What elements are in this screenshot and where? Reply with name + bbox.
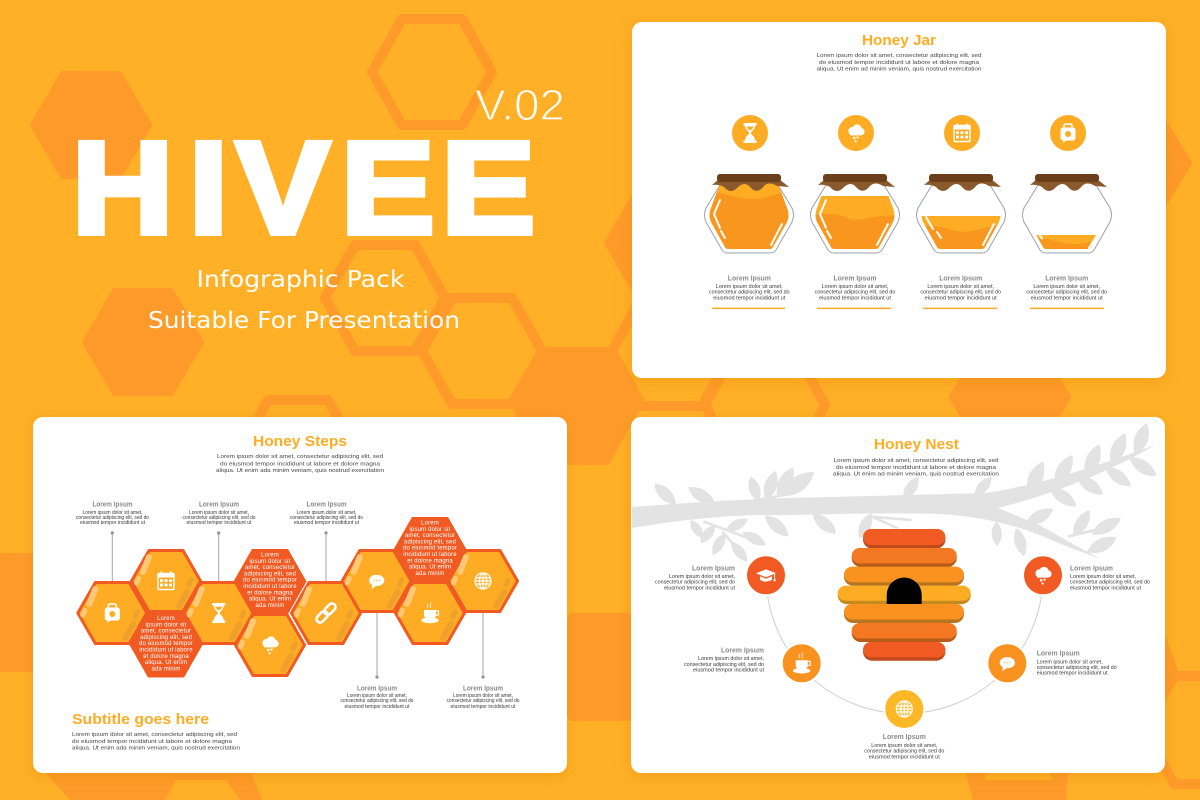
callout bottom 1: consectetur adipiscing elit, sed do <box>340 698 414 704</box>
arc connector <box>766 575 1043 714</box>
label: cloud <box>1070 566 1150 592</box>
callout bottom 2: Lorem ipsum dolor sit amet, <box>453 693 513 699</box>
label: graduation: Lorem ipsum dolor sit amet, <box>669 574 735 580</box>
jar caption 1 <box>709 276 790 309</box>
intro text <box>216 454 384 474</box>
label: graduation <box>655 566 736 592</box>
hex: text 3: ada minim <box>415 571 445 577</box>
label: globe: Lorem Ipsum <box>883 734 926 741</box>
title: honey nest: Honey Nest <box>874 436 959 453</box>
jar caption 1: Lorem Ipsum <box>728 276 771 282</box>
hex: text 1: ipsum dolor sit <box>146 622 187 628</box>
hex: chat <box>342 550 411 612</box>
icon: bag <box>1050 115 1086 151</box>
hex: text 3: et dolore magna <box>407 558 453 564</box>
jar 2: three quarters <box>810 174 900 255</box>
jar caption 4: consectetur adipiscing elit, sed do <box>1026 290 1107 296</box>
subtitle block <box>72 711 240 752</box>
callout bottom 2: Lorem Ipsum <box>463 685 503 692</box>
label: chat: consectetur adipiscing elit, sed do <box>1037 665 1117 671</box>
hex: globe <box>448 550 518 612</box>
label: globe: Lorem ipsum dolor sit amet, <box>871 743 937 749</box>
label: cloud: Lorem Ipsum <box>1070 566 1113 573</box>
hex: text 1: adipiscing elit, sed <box>140 635 192 641</box>
honeycomb chart <box>78 517 518 678</box>
jar caption 4: Lorem Ipsum <box>1045 276 1088 282</box>
callout top 3: Lorem ipsum dolor sit amet, <box>296 510 356 516</box>
jar caption 2 <box>815 276 895 309</box>
hex: text 2: aliqua. Ut enim <box>249 597 291 603</box>
hex: hourglass <box>184 582 253 644</box>
hex: text 1: aliqua. Ut enim <box>145 660 187 666</box>
callout top 3: eiusmod tempor incididunt ut <box>294 520 359 526</box>
hex: text 2 <box>234 549 306 614</box>
jar caption 2: consectetur adipiscing elit, sed do <box>815 290 895 296</box>
hex: camera <box>78 582 147 644</box>
intro text: do eiusmod tempor incididunt ut labore et dolore magna <box>220 461 381 467</box>
hive door <box>887 578 922 604</box>
icon: calendar <box>944 115 980 151</box>
hex: text 2: ipsum dolor sit <box>250 559 291 565</box>
label: cup: Lorem Ipsum <box>721 647 764 654</box>
callout top 2: Lorem Ipsum <box>199 502 239 509</box>
label: cup: Lorem ipsum dolor sit amet, <box>698 656 764 662</box>
subtitle: Infographic Pack <box>196 267 405 293</box>
hex: text 1: et dolore magna <box>143 654 189 660</box>
callout top 1 <box>76 502 149 582</box>
label: globe <box>864 734 944 760</box>
subtitle block: aliqua. Ut enim ada minim veniam, quis nostrud exercitation <box>72 746 240 752</box>
callout bottom 1 <box>340 610 414 710</box>
node: cup <box>782 643 822 683</box>
callout top 1: consectetur adipiscing elit, sed do <box>76 515 149 521</box>
hex: text 1: Lorem <box>157 616 175 622</box>
callout bottom 1: Lorem Ipsum <box>357 685 397 692</box>
callout bottom 1: Lorem ipsum dolor sit amet, <box>347 693 407 699</box>
label: cloud: eiusmod tempor incididunt ut <box>1070 586 1142 592</box>
jar caption 2: eiusmod tempor incididunt ut <box>819 296 892 302</box>
jar caption 3: consectetur adipiscing elit, sed do <box>920 290 1001 296</box>
hex: text 1: do eiusmod tempor <box>139 641 193 647</box>
callout top 3: consectetur adipiscing elit, sed do <box>290 515 363 521</box>
jar caption 4 <box>1026 276 1107 309</box>
label: graduation: consectetur adipiscing elit, sed do <box>655 580 735 586</box>
callout top 1: Lorem Ipsum <box>92 502 132 509</box>
hex: text 1: ada minim <box>151 666 181 672</box>
callout top 2: Lorem ipsum dolor sit amet, <box>189 510 249 516</box>
jar 3: half <box>916 174 1006 255</box>
label: chat <box>1037 651 1117 677</box>
beehive <box>838 529 971 661</box>
hex: text 2: adipiscing elit, sed <box>244 571 296 577</box>
jar caption 4: Lorem ipsum dolor sit amet, <box>1033 284 1100 290</box>
subtitle block: do eiusmod tempor incididunt ut labore et dolore magna <box>72 739 233 745</box>
callout bottom 2: consectetur adipiscing elit, sed do <box>446 698 520 704</box>
hex: text 2: incididunt ut labore <box>243 584 297 590</box>
hex: link <box>292 582 360 644</box>
jar caption 2: Lorem ipsum dolor sit amet, <box>822 284 888 290</box>
callout top 3 <box>290 502 363 582</box>
label: globe: consectetur adipiscing elit, sed do <box>864 749 944 755</box>
callout top 1: Lorem ipsum dolor sit amet, <box>82 510 142 516</box>
callout bottom 1: eiusmod tempor incididunt ut <box>344 704 410 710</box>
main title: HIVEE <box>72 114 535 261</box>
label: chat: Lorem Ipsum <box>1037 651 1080 658</box>
callout bottom 2: eiusmod tempor incididunt ut <box>450 704 516 710</box>
label: chat: Lorem ipsum dolor sit amet, <box>1037 660 1103 666</box>
hex: text 3: Lorem <box>421 520 439 526</box>
callout bottom 2 <box>446 610 520 710</box>
jar caption 4: eiusmod tempor incididunt ut <box>1031 296 1103 302</box>
icon: cloud <box>838 115 874 151</box>
hex: text 1 <box>130 612 202 678</box>
hex: text 1: incididunt ut labore <box>139 648 193 654</box>
hex: text 3: aliqua. Ut enim <box>409 565 451 571</box>
label: graduation: eiusmod tempor incididunt ut <box>664 586 736 592</box>
jar 4: low <box>1022 174 1112 255</box>
hex: text 1: amet, consectetur <box>141 629 191 635</box>
hex: text 3: amet, consectetur <box>405 533 455 539</box>
intro text: do eiusmod tempor incididunt ut labore et dolore magna <box>819 60 980 66</box>
node: chat <box>987 643 1027 683</box>
hex: text 2: ada minim <box>255 603 285 609</box>
label: cup: eiusmod tempor incididunt ut <box>693 668 765 674</box>
version label: V.02 <box>475 81 565 130</box>
title: honey steps: Honey Steps <box>253 433 347 450</box>
jar caption 3: Lorem Ipsum <box>939 276 982 282</box>
jar 1: full <box>704 174 794 255</box>
jar caption 1: Lorem ipsum dolor sit amet, <box>716 284 783 290</box>
tree branch <box>632 425 1155 560</box>
title: honey jar: Honey Jar <box>862 32 936 49</box>
hex: cup <box>396 582 464 644</box>
icon: hourglass <box>732 115 768 151</box>
callout top 2: eiusmod tempor incididunt ut <box>186 520 252 526</box>
jar caption 3: Lorem ipsum dolor sit amet, <box>927 284 994 290</box>
node: cloud <box>1023 555 1063 595</box>
jar caption 3 <box>920 276 1001 309</box>
label: cup <box>684 647 765 674</box>
label: cloud: Lorem ipsum dolor sit amet, <box>1070 574 1136 580</box>
hex: text 3: incididunt ut labore <box>403 552 457 558</box>
jar caption 1: eiusmod tempor incididunt ut <box>713 296 786 302</box>
hex: cloud <box>236 614 304 676</box>
jar caption 1: consectetur adipiscing elit, sed do <box>709 290 790 296</box>
intro text: Lorem ipsum dolor sit amet, consectetur adipiscing elit, sed <box>834 458 998 464</box>
intro text: aliqua. Ut enim ada minim veniam, quis nostrud exercitation <box>216 468 384 474</box>
hex: text 2: do eiusmod tempor <box>243 578 297 584</box>
intro text: Lorem ipsum dolor sit amet, consectetur adipiscing elit, sed <box>217 454 383 460</box>
hex: text 3: adipiscing elit, sed <box>404 539 456 545</box>
panel: honey nest <box>631 417 1165 773</box>
callout top 1: eiusmod tempor incididunt ut <box>80 520 145 526</box>
hex: text 2: et dolore magna <box>247 590 293 596</box>
intro text: aliqua. Ut enim ad minim veniam, quis nostrud exercitation <box>816 66 982 72</box>
panel: honey jar <box>632 22 1166 378</box>
intro text <box>816 53 982 72</box>
node: globe <box>884 689 924 729</box>
intro text: Lorem ipsum dolor sit amet, consectetur adipiscing elit, sed <box>816 53 982 59</box>
label: cup: consectetur adipiscing elit, sed do <box>684 662 764 668</box>
callout top 3: Lorem Ipsum <box>306 502 346 509</box>
subtitle: Suitable For Presentation <box>148 308 460 334</box>
label: globe: eiusmod tempor incididunt ut <box>869 754 940 760</box>
label: graduation: Lorem Ipsum <box>692 566 735 573</box>
callout top 2 <box>182 502 256 582</box>
hex: calendar <box>132 550 200 612</box>
subtitle block: Subtitle goes here <box>72 711 209 728</box>
hex: text 2: amet, consectetur <box>245 565 295 571</box>
hex: text 3 <box>394 517 466 582</box>
label: cloud: consectetur adipiscing elit, sed do <box>1070 580 1150 586</box>
jar caption 3: eiusmod tempor incididunt ut <box>925 296 997 302</box>
hex: text 2: Lorem <box>261 552 279 558</box>
intro text <box>833 458 999 478</box>
panel: honey steps <box>33 417 567 773</box>
intro text: aliqua. Ut enim ad minim veniam, quis nostrud exercitation <box>833 472 999 478</box>
intro text: do eiusmod tempor incididunt ut labore et dolore magna <box>836 465 997 471</box>
subtitle block: Lorem ipsum dolor sit amet, consectetur adipiscing elit, sed <box>72 732 237 738</box>
label: chat: eiusmod tempor incididunt ut <box>1037 671 1108 677</box>
jar caption 2: Lorem Ipsum <box>834 276 876 282</box>
callout top 2: consectetur adipiscing elit, sed do <box>182 515 256 521</box>
node: graduation <box>746 555 786 595</box>
subtitle <box>148 267 460 334</box>
hex: text 3: do eiusmod tempor <box>403 546 457 552</box>
hex: text 3: ipsum dolor sit <box>410 527 451 533</box>
